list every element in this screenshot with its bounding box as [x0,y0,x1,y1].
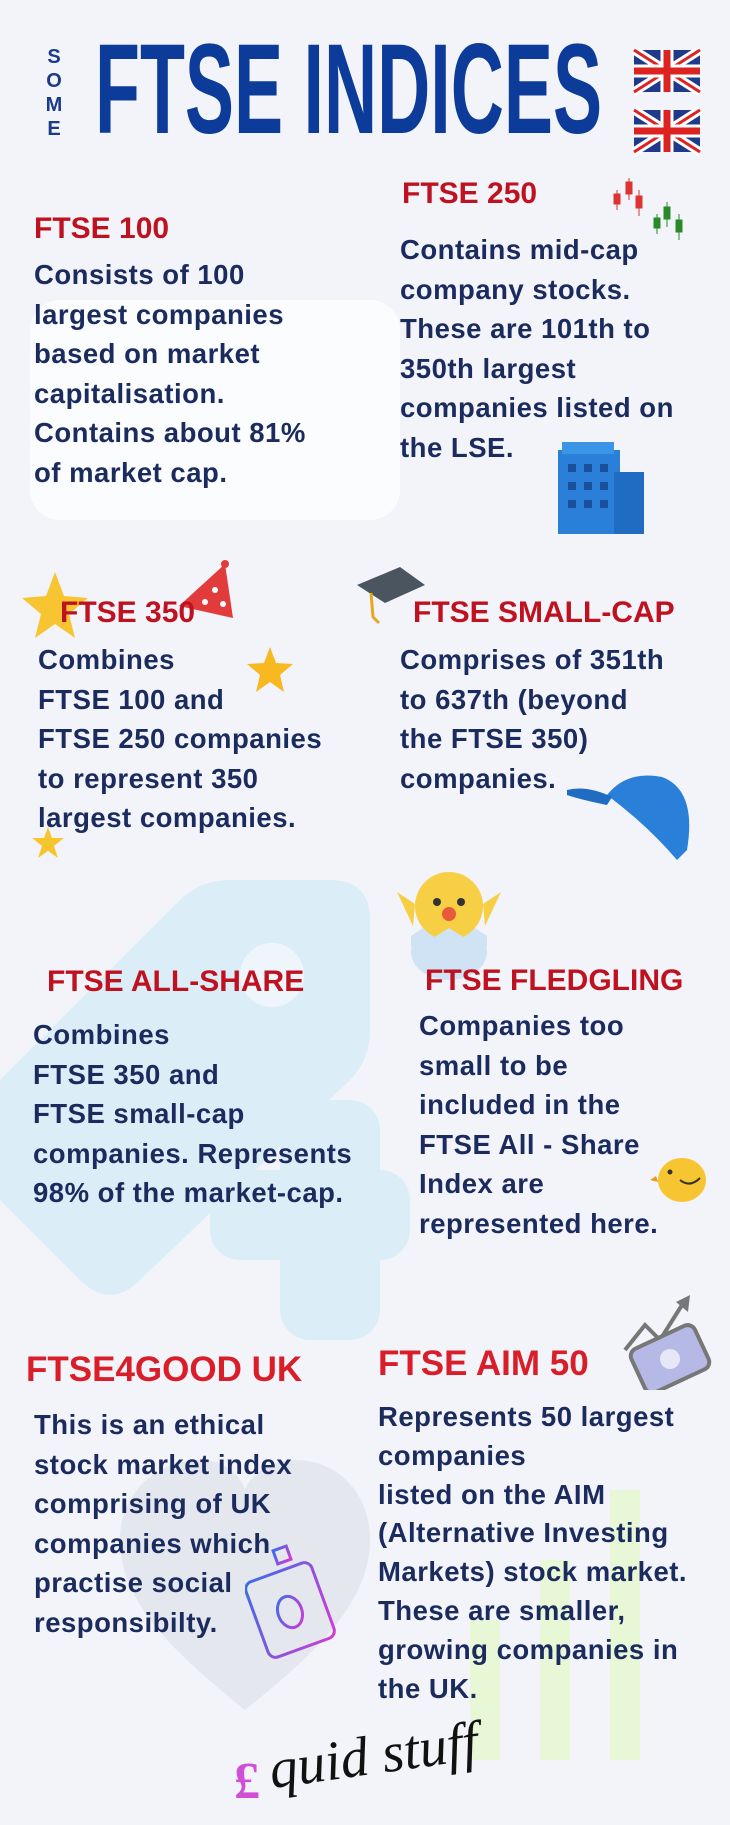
text: to 637th (beyond [400,684,628,714]
icon: hatching chick [397,872,501,980]
panel: FTSE AIM 50 [378,1295,712,1704]
text: FTSE small-cap [33,1098,245,1129]
text: Represents 50 largest [378,1401,674,1432]
text: the UK. [378,1673,478,1704]
text: FTSE 250 companies [38,723,322,754]
icon: small stars [247,647,293,692]
panel: FTSE4GOOD UK [26,1350,336,1659]
heading: FTSE 250 [402,177,537,210]
text: represented here. [419,1208,658,1238]
text [34,259,306,488]
heading: FTSE FLEDGLING [425,964,683,997]
text [419,1010,658,1239]
panel: FTSE 250 [400,177,682,534]
text: responsibilty. [34,1606,218,1638]
icon: UK flags [632,48,702,156]
icon: blue cap [567,776,690,860]
text: growing companies in [378,1634,678,1665]
text: company stocks. [400,274,631,304]
text: to represent 350 [38,762,258,794]
text: Companies too [419,1010,624,1041]
heading: FTSE 350 [60,596,195,629]
text: Contains mid-cap [400,234,639,265]
text: Comprises of 351th [400,644,664,675]
text: companies which [34,1528,271,1558]
text: companies listed on [400,392,674,423]
icon: chick [650,1158,706,1202]
heading: FTSE 100 [34,212,169,245]
heading: SOME (vertical): O [46,70,62,92]
heading: SOME (vertical): S [47,46,61,68]
heading: SOME (vertical): E [47,118,61,140]
text: Index are [419,1168,544,1199]
icon: eco container [245,1544,336,1659]
panel: FTSE 100 [34,212,306,488]
text: These are 101th to [400,313,650,344]
text: This is an ethical [34,1409,265,1440]
text: listed on the AIM [378,1479,605,1510]
text: practise social [34,1567,233,1598]
heading: SOME (vertical): M [46,94,62,116]
text: capitalisation. [34,378,225,408]
heading: SOME (vertical) [46,46,62,140]
text [34,1409,292,1638]
icon: money with arrow [624,1295,712,1390]
text: companies. Represents [33,1138,352,1168]
panel: FTSE 350 [22,560,322,858]
text [33,1019,352,1208]
panel: FTSE FLEDGLING [397,872,706,1239]
text: included in the [419,1089,621,1120]
text: FTSE 350 and [33,1058,219,1090]
text: the LSE. [400,432,514,462]
text: 350th largest [400,352,576,384]
text: stock market index [34,1448,292,1480]
text: Consists of 100 [34,259,245,290]
icon: building [558,442,644,534]
background decoration: green bars [470,1490,640,1760]
text: Markets) stock market. [378,1556,687,1587]
logo: quid stuff [234,1710,482,1810]
text: companies. [400,762,556,794]
text [400,234,674,462]
icon: candlesticks [614,178,682,240]
heading: FTSE ALL-SHARE [47,965,304,998]
text: small to be [419,1050,568,1080]
icon: graduation cap [357,567,425,624]
heading: FTSE SMALL-CAP [413,596,675,629]
background decoration: tag shape [0,880,410,1340]
text [378,1401,687,1704]
text: comprising of UK [34,1488,271,1519]
text: (Alternative Investing [378,1517,669,1548]
title: FTSE INDICES [95,18,602,161]
text: 98% of the market-cap. [33,1177,344,1208]
panel: FTSE ALL-SHARE [33,965,352,1208]
text: Combines [33,1019,170,1050]
text: FTSE 100 and [38,684,224,714]
background decoration: white panel [30,300,400,520]
logo pound sign: £ [234,1753,260,1810]
text: Contains about 81% [34,417,306,448]
text: the FTSE 350) [400,723,588,754]
text: Combines [38,644,175,675]
text: FTSE All - Share [419,1128,640,1160]
panel: FTSE SMALL-CAP [357,567,690,860]
text: These are smaller, [378,1595,626,1626]
text [400,644,664,794]
text: companies [378,1440,526,1471]
text: largest companies. [38,802,296,833]
logo text: quid stuff [265,1710,482,1801]
text: of market cap. [34,456,227,488]
background decoration: heart [120,1460,370,1710]
text: based on market [34,338,260,369]
text: largest companies [34,298,284,330]
heading: FTSE AIM 50 [378,1344,589,1383]
icon: party hat [179,560,233,618]
heading: FTSE4GOOD UK [26,1350,302,1389]
text [38,644,322,833]
icon: star [22,572,88,638]
